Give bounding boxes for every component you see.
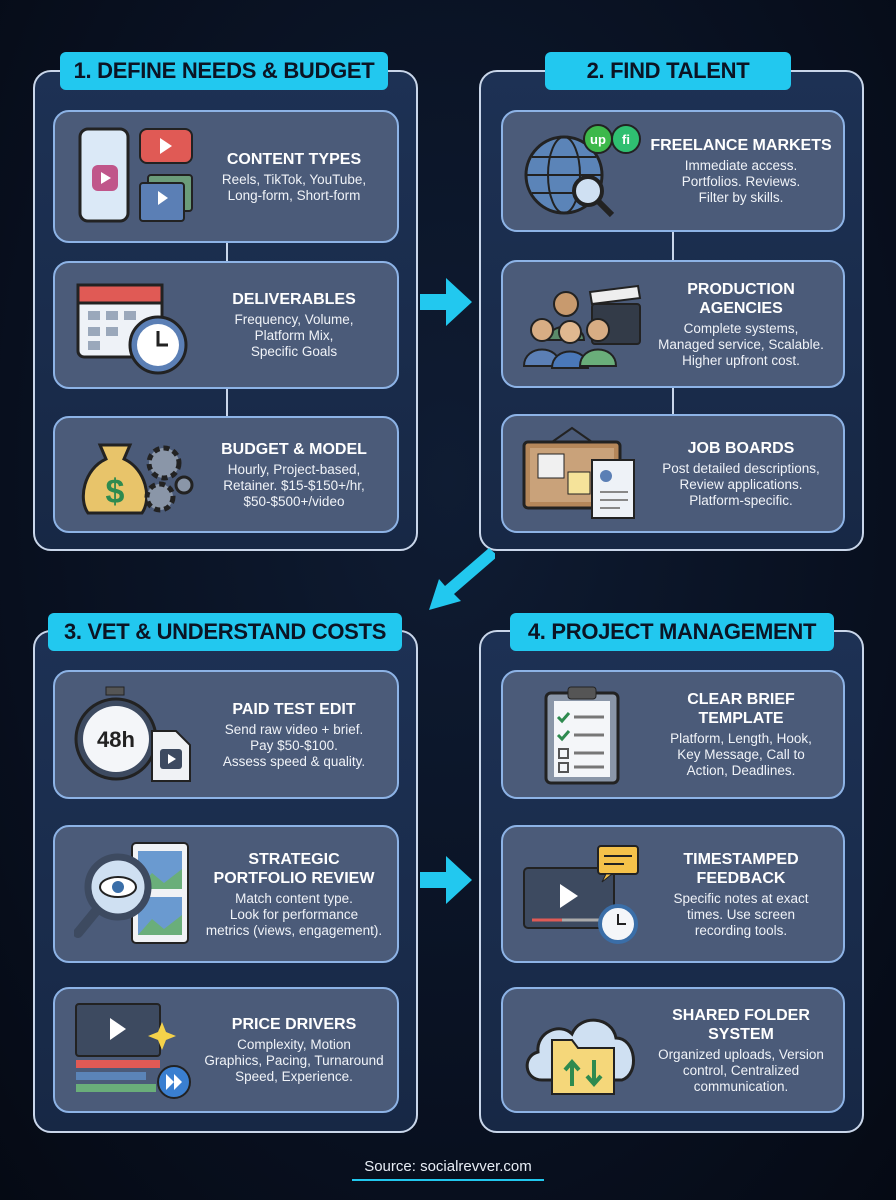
card: timestamped feedback: times. Use screen xyxy=(687,906,795,922)
card: production agencies: Complete systems, xyxy=(684,320,798,336)
card: freelance markets: Portfolios. Reviews. xyxy=(682,174,800,189)
card: clear brief template: Action, Deadlines. xyxy=(687,763,795,778)
icon: calendar and clock xyxy=(76,284,188,374)
card: job boards: JOB BOARDS xyxy=(688,440,794,456)
icon: globe with logos: fi xyxy=(622,132,630,147)
card: production agencies xyxy=(501,260,845,388)
card: budget & model: Retainer. $15-$150+/hr, xyxy=(223,478,365,492)
card: shared folder system: SYSTEM xyxy=(708,1026,774,1042)
card: content types: CONTENT TYPES xyxy=(227,150,361,168)
card: price drivers xyxy=(53,987,399,1113)
badge: 2 xyxy=(545,52,791,90)
icon: globe with logos xyxy=(524,124,641,217)
card: price drivers: Graphics, Pacing, Turnaround xyxy=(204,1053,384,1068)
card: shared folder system xyxy=(501,987,845,1113)
badge: 2: 2. FIND TALENT xyxy=(587,58,749,83)
arrow: 3 to 4 xyxy=(420,856,472,904)
source footer: Source: socialrevver.com xyxy=(364,1158,532,1175)
card: paid test edit xyxy=(53,670,399,799)
card: budget & model xyxy=(53,416,399,533)
card: deliverables: Specific Goals xyxy=(251,344,337,359)
card: deliverables: Frequency, Volume, xyxy=(234,312,354,327)
card: deliverables xyxy=(53,261,399,389)
icon: editing timeline xyxy=(75,1003,191,1099)
card: job boards: Review applications. xyxy=(679,476,803,492)
card: freelance markets xyxy=(501,110,845,232)
card: strategic portfolio review: STRATEGIC xyxy=(248,850,340,868)
card: clear brief template xyxy=(501,670,845,799)
card: budget & model: $50-$500+/video xyxy=(244,494,344,508)
badge: 1: 1. DEFINE NEEDS & BUDGET xyxy=(74,58,374,83)
card: job boards: Platform-specific. xyxy=(689,492,793,508)
panel: project management xyxy=(479,630,864,1133)
card: production agencies: Higher upfront cost. xyxy=(682,352,800,368)
badge: 3: 3. VET & UNDERSTAND COSTS xyxy=(64,619,386,644)
card: strategic portfolio review: PORTFOLIO REVIEW xyxy=(214,870,374,886)
icon: cloud folder xyxy=(526,1018,635,1095)
icon: video with comment and clock xyxy=(523,845,639,944)
card: production agencies: PRODUCTION xyxy=(687,280,795,298)
icon: stopwatch 48h: 48h xyxy=(97,726,135,752)
card: shared folder system: SHARED FOLDER xyxy=(672,1006,810,1024)
badge: 4 xyxy=(510,613,834,651)
card: production agencies: AGENCIES xyxy=(699,300,783,316)
panel: define needs & budget xyxy=(33,70,418,551)
card: paid test edit: Send raw video + brief. xyxy=(225,722,363,736)
icon: corkboard and resume xyxy=(522,426,635,519)
icon: globe with logos: up xyxy=(590,132,606,147)
icon: money bag and gears: $ xyxy=(106,472,125,510)
card: price drivers: Speed, Experience. xyxy=(235,1069,353,1084)
icon: phone and videos xyxy=(78,128,193,222)
card: clear brief template: Key Message, Call to xyxy=(677,747,805,762)
card: paid test edit: Pay $50-$100. xyxy=(250,738,338,752)
card: price drivers: PRICE DRIVERS xyxy=(232,1016,356,1033)
card: content types: Long-form, Short-form xyxy=(228,188,360,202)
card: price drivers: Complexity, Motion xyxy=(237,1037,351,1052)
icon: team and clapper xyxy=(523,284,642,369)
panel: vet & understand costs xyxy=(33,630,418,1133)
card: job boards xyxy=(501,414,845,533)
card: timestamped feedback: Specific notes at exact xyxy=(673,890,809,906)
card: freelance markets: Filter by skills. xyxy=(699,190,783,205)
card: budget & model: Hourly, Project-based, xyxy=(228,462,360,476)
arrow: 1 to 2 xyxy=(420,278,472,326)
badge: 1 xyxy=(60,52,388,90)
icon: clipboard checklist xyxy=(544,686,620,784)
card: strategic portfolio review: Match content type. xyxy=(235,890,353,906)
card: timestamped feedback xyxy=(501,825,845,963)
card: production agencies: Managed service, Scalable. xyxy=(658,336,824,352)
badge: 4: 4. PROJECT MANAGEMENT xyxy=(528,619,816,644)
icon: magnifier over photos xyxy=(74,842,189,944)
icon: stopwatch 48h xyxy=(74,686,191,782)
card: strategic portfolio review: metrics (views, engagement). xyxy=(206,922,382,938)
panel: find talent xyxy=(479,70,864,551)
card: content types xyxy=(53,110,399,243)
card: job boards: Post detailed descriptions, xyxy=(662,460,820,476)
card: deliverables: Platform Mix, xyxy=(255,328,333,343)
card: freelance markets: FREELANCE MARKETS xyxy=(650,137,832,154)
card: shared folder system: Organized uploads, Version xyxy=(658,1046,824,1062)
badge: 3 xyxy=(48,613,402,651)
source footer xyxy=(352,1158,544,1181)
card: strategic portfolio review xyxy=(53,825,399,963)
card: paid test edit: Assess speed & quality. xyxy=(223,754,365,768)
card: clear brief template: CLEAR BRIEF TEMPLATE xyxy=(687,691,795,727)
card: clear brief template: Platform, Length, Hook, xyxy=(670,731,812,746)
card: deliverables: DELIVERABLES xyxy=(232,291,356,308)
arrow: 2 to 3 diagonal xyxy=(429,548,495,610)
card: budget & model: BUDGET & MODEL xyxy=(221,440,367,458)
card: freelance markets: Immediate access. xyxy=(685,158,797,173)
card: shared folder system: control, Centralized xyxy=(683,1062,799,1078)
card: timestamped feedback: TIMESTAMPED xyxy=(683,850,799,868)
card: timestamped feedback: FEEDBACK xyxy=(697,870,785,886)
card: content types: Reels, TikTok, YouTube, xyxy=(222,172,366,186)
icon: money bag and gears xyxy=(82,444,194,514)
card: timestamped feedback: recording tools. xyxy=(695,922,787,938)
card: shared folder system: communication. xyxy=(694,1078,788,1094)
card: strategic portfolio review: Look for performance xyxy=(230,906,358,922)
card: paid test edit: PAID TEST EDIT xyxy=(232,700,356,718)
